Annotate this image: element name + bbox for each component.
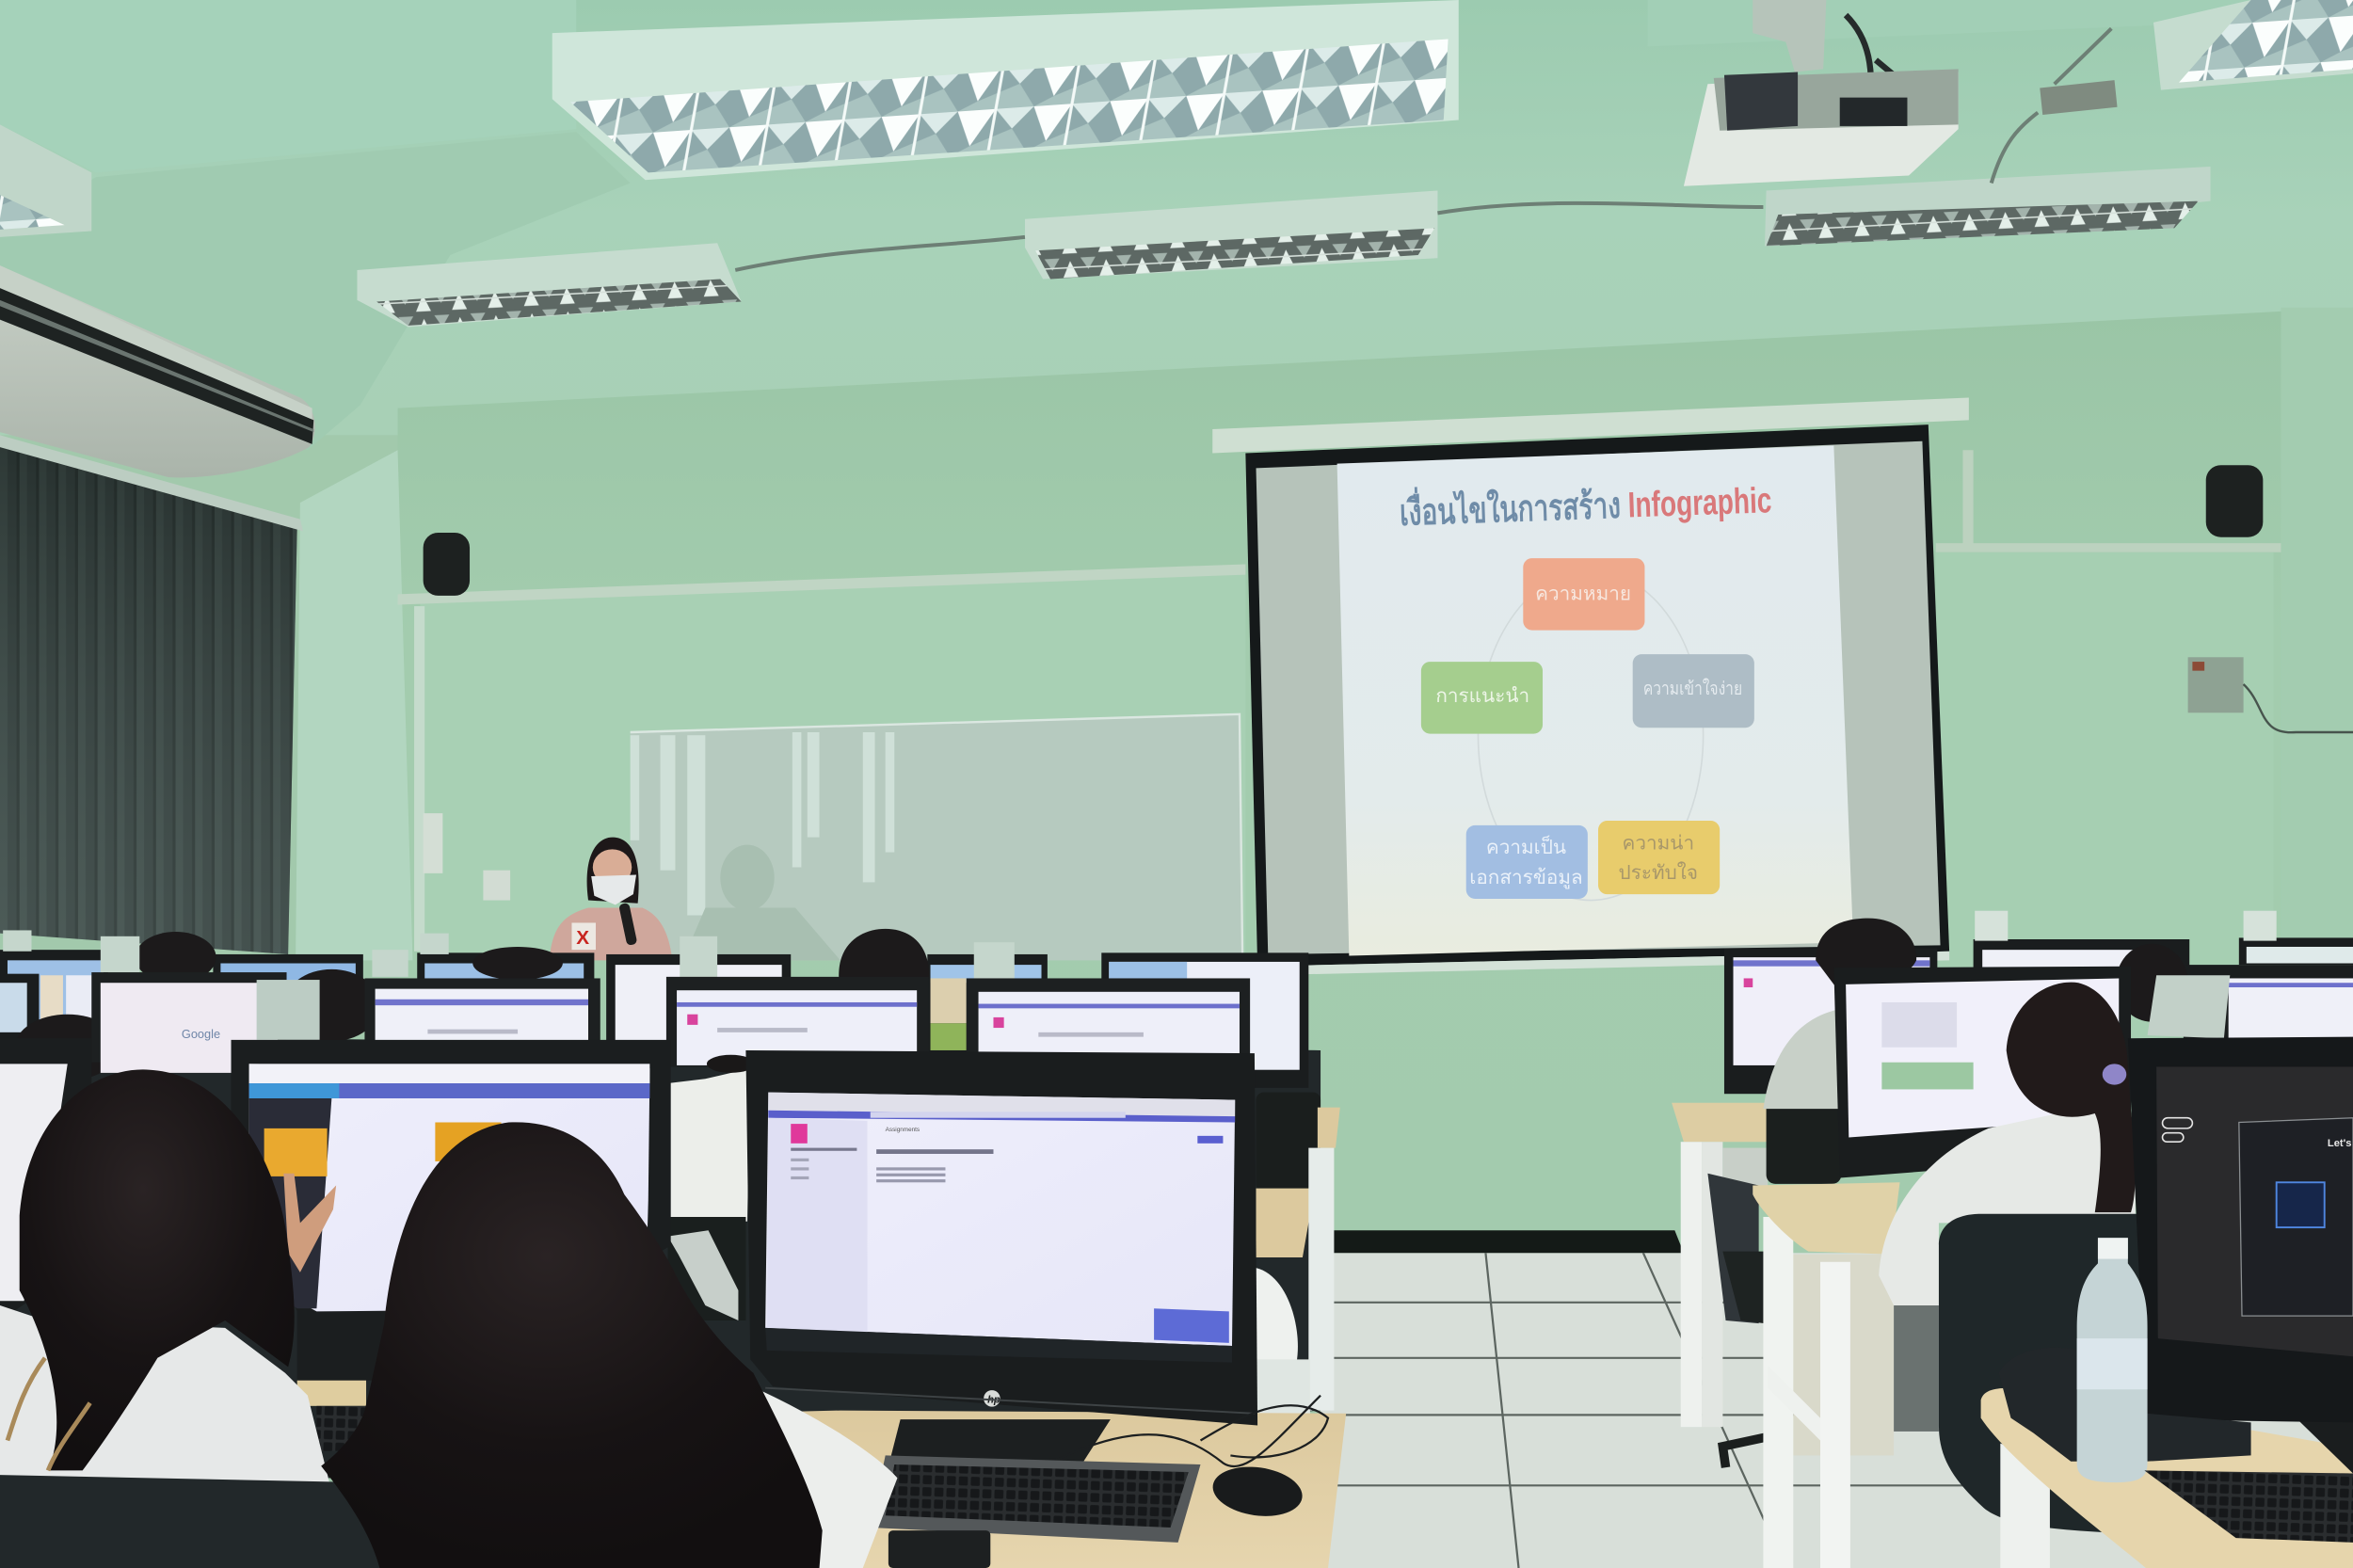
slide box: yellow [1598, 821, 1720, 894]
slide box: orange [1523, 558, 1644, 631]
monitor: centre right [967, 978, 1250, 1064]
slide box: green: การแนะนำ [1435, 685, 1529, 707]
main desk [720, 1411, 1346, 1568]
monitor right 2 [1974, 939, 2189, 975]
monitor far left edge [0, 1038, 91, 1320]
chair back [1939, 1214, 2146, 1535]
hair [587, 838, 639, 904]
projector [1684, 0, 1959, 186]
air conditioner [0, 265, 315, 477]
hair tie [2103, 1064, 2126, 1085]
conduit box [2040, 80, 2118, 115]
teacher [550, 838, 672, 960]
monitor back row 5 with campus photo [927, 954, 1048, 1053]
slide box: grey [1633, 654, 1754, 728]
slide box: blue [1466, 825, 1588, 899]
grill [1724, 72, 1798, 131]
hair tips [8, 1358, 90, 1470]
desk [1257, 1189, 1315, 1257]
right student [1879, 983, 2136, 1323]
slide box: orange: ความหมาย [1535, 584, 1631, 605]
screen content [249, 1064, 649, 1311]
chair arm [1894, 1305, 1939, 1432]
base shadow behind desks [0, 1035, 1321, 1500]
ceiling bracket [1753, 0, 1826, 72]
search box [871, 1112, 1126, 1118]
hair [20, 1069, 295, 1470]
slide box: yellow: ประทับใจ [1619, 861, 1698, 884]
ceiling light: top left [0, 124, 91, 237]
rear panel [1714, 69, 1959, 131]
screen frame [1245, 424, 1949, 967]
monitor: google page [91, 972, 287, 1073]
dress [550, 908, 672, 960]
cables [1846, 15, 1903, 120]
left panel [249, 1098, 331, 1308]
monitor back row 1 [0, 950, 108, 1040]
canvas design [435, 1123, 502, 1161]
mask [591, 874, 636, 904]
ceiling light: right [1765, 167, 2211, 246]
slide ring [1478, 570, 1704, 901]
ceiling light: centre [1025, 190, 1437, 280]
curtain [0, 435, 303, 954]
wall switches [424, 813, 510, 901]
wall electric box [2188, 657, 2353, 732]
chair [1257, 1093, 1321, 1192]
hp logo [984, 1390, 1000, 1407]
body [1684, 72, 1959, 186]
speaker right [2206, 465, 2263, 537]
projection screen [1212, 397, 1969, 975]
keyboard centre [871, 1455, 1201, 1543]
hair [2007, 983, 2136, 1212]
student back right [1763, 919, 1916, 1109]
cables [1050, 1396, 1328, 1466]
front right desk [1981, 1388, 2353, 1568]
slide [1337, 445, 1853, 956]
monitor back row 2 [213, 954, 363, 1015]
pink tile [791, 1124, 808, 1144]
floor [1321, 1230, 2353, 1568]
plastic bag [668, 1230, 738, 1320]
red x sign: X [576, 927, 589, 949]
sweater [1879, 1108, 2136, 1323]
desk and keyboard left [297, 1381, 368, 1451]
monitor: centre left [364, 978, 600, 1050]
wall rail and conduit [398, 450, 2281, 952]
browser tabs [768, 1093, 1235, 1116]
water bottle [2077, 1238, 2148, 1482]
front centre monitor [745, 1050, 1257, 1426]
monitor right 3 [2239, 937, 2353, 965]
slide box: blue: ความเป็น [1486, 834, 1566, 858]
sleeve [1257, 1268, 1298, 1363]
left large monitor [232, 1040, 671, 1381]
sidebar [767, 1118, 868, 1333]
browser tabs [249, 1064, 649, 1083]
heads back row [135, 929, 929, 983]
speaker left [424, 533, 470, 596]
whiteboard [631, 714, 1242, 960]
assignment heading: Assignments [886, 1127, 920, 1133]
shirt [0, 1305, 331, 1492]
student head far left [15, 1015, 120, 1080]
front right chair [1894, 1214, 2146, 1535]
screen housing [1212, 397, 1969, 453]
monitor: pink tile [666, 977, 929, 1067]
monitor right 4 [2184, 965, 2353, 1043]
shirt [675, 1373, 897, 1568]
front chair bottom left [0, 1475, 412, 1568]
template thumbnails [264, 1128, 328, 1176]
monitor back row 4 [606, 954, 791, 1060]
far desk [1318, 1108, 1340, 1148]
monitor back row 3 [417, 952, 594, 990]
conduits [735, 28, 2111, 270]
right back monitors [1724, 911, 2353, 1177]
monitor right 1 [1724, 949, 1937, 1094]
front centre monitor: hp [987, 1395, 1000, 1406]
back wall tags [1975, 911, 2277, 941]
back row monitors [0, 929, 1308, 1088]
back wall [398, 308, 2353, 1253]
slide title: เงื่อนไขในการสร้าง Infographic [1399, 474, 1772, 534]
monitor right 5 with map [1833, 967, 2131, 1177]
monitor stand [886, 1419, 1111, 1478]
desk leg [1308, 1148, 1334, 1411]
middle row monitors [0, 969, 1250, 1080]
front student [321, 1122, 897, 1568]
mouse [1209, 1462, 1305, 1522]
centre desks and chair [1257, 1093, 1340, 1416]
phone [888, 1530, 990, 1568]
ceiling light: left middle [357, 243, 742, 328]
app header [768, 1111, 1235, 1123]
face [593, 849, 632, 886]
student head with tag [257, 969, 379, 1041]
bag [1999, 1348, 2251, 1462]
monitor: google page: Google [182, 1027, 220, 1041]
app bar [249, 1083, 649, 1098]
chair far right [1707, 1100, 1841, 1467]
screen surface [1257, 441, 1941, 954]
student shirt behind monitor [668, 1055, 755, 1320]
microphone [618, 903, 637, 946]
desk far right [1672, 1103, 1769, 1427]
monitor: far left [0, 974, 39, 1040]
screen [765, 1093, 1235, 1346]
right desks [1672, 1100, 1899, 1568]
slide box: yellow: ความน่า [1623, 832, 1694, 854]
monitor back row 6 [1101, 952, 1308, 1088]
taskbar [765, 1328, 1232, 1363]
monitor tags [3, 930, 1015, 980]
desk near right panel [1753, 1182, 1899, 1568]
slide box: blue: เอกสารข้อมูล [1469, 867, 1583, 889]
head behind and tag [2116, 944, 2230, 1038]
keyboard right [2144, 1470, 2353, 1543]
slide box: green [1421, 662, 1543, 734]
ceiling [0, 0, 2353, 450]
front right monitor [2128, 1037, 2353, 1474]
hand [283, 1174, 336, 1272]
shoulder left [338, 1455, 376, 1500]
left student [0, 1069, 331, 1492]
ceiling light: top right [2153, 0, 2353, 90]
notification [1154, 1308, 1229, 1343]
slide box: grey: ความเข้าใจง่าย [1643, 678, 1742, 699]
hair [321, 1122, 823, 1568]
main ceiling light [552, 0, 1459, 180]
left side wall [296, 450, 412, 960]
